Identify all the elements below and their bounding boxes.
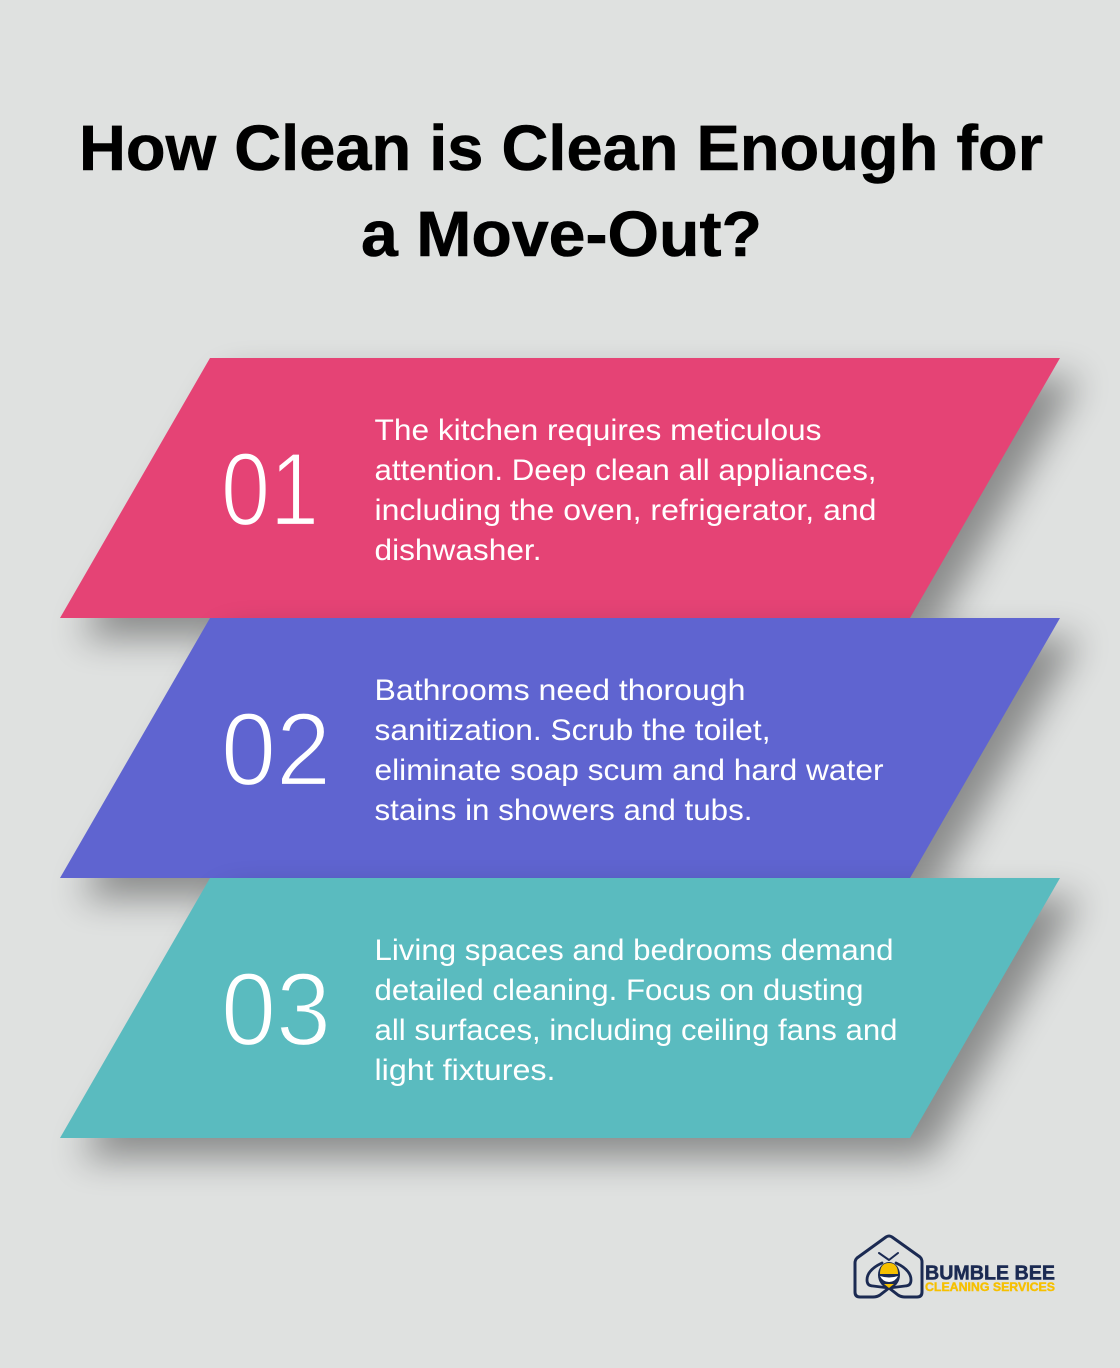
text: bathrooms: Bathrooms need thorough [374, 674, 746, 707]
text: living spaces: light fixtures. [374, 1054, 556, 1087]
panel: step 03 living spaces [60, 878, 1080, 1158]
logo tagline: CLEANING SERVICES [925, 1280, 1055, 1294]
text: living spaces: detailed cleaning. Focus on dusting [374, 974, 864, 1007]
text: bathrooms: eliminate soap scum and hard water [374, 754, 884, 787]
text: kitchen: dishwasher. [374, 534, 542, 567]
title: How Clean is Clean Enough for [79, 112, 1043, 184]
number 02: 02 [221, 692, 331, 808]
text: bathrooms: sanitization. Scrub the toilet, [374, 714, 770, 747]
panel: step 01 kitchen [60, 358, 1080, 638]
text: living spaces: all surfaces, including ceiling fans and [374, 1014, 898, 1047]
logo: Bumble Bee Cleaning Services [855, 1236, 1055, 1297]
title: a Move-Out? [361, 198, 762, 270]
text: bathrooms: stains in showers and tubs. [374, 794, 752, 827]
text: kitchen: attention. Deep clean all appliances, [374, 454, 876, 487]
title [79, 112, 1043, 270]
number 01: 01 [221, 432, 319, 548]
logo wordmark: BUMBLE BEE [925, 1262, 1055, 1284]
text: bathrooms [374, 674, 884, 827]
text: kitchen [374, 414, 876, 567]
icon: house with bee [855, 1236, 922, 1297]
number 03: 03 [221, 952, 331, 1068]
text: living spaces [374, 934, 898, 1087]
text: kitchen: including the oven, refrigerator, and [374, 494, 876, 527]
panel: step 02 bathrooms [60, 618, 1080, 898]
text: kitchen: The kitchen requires meticulous [374, 414, 822, 447]
text: living spaces: Living spaces and bedrooms demand [374, 934, 894, 967]
